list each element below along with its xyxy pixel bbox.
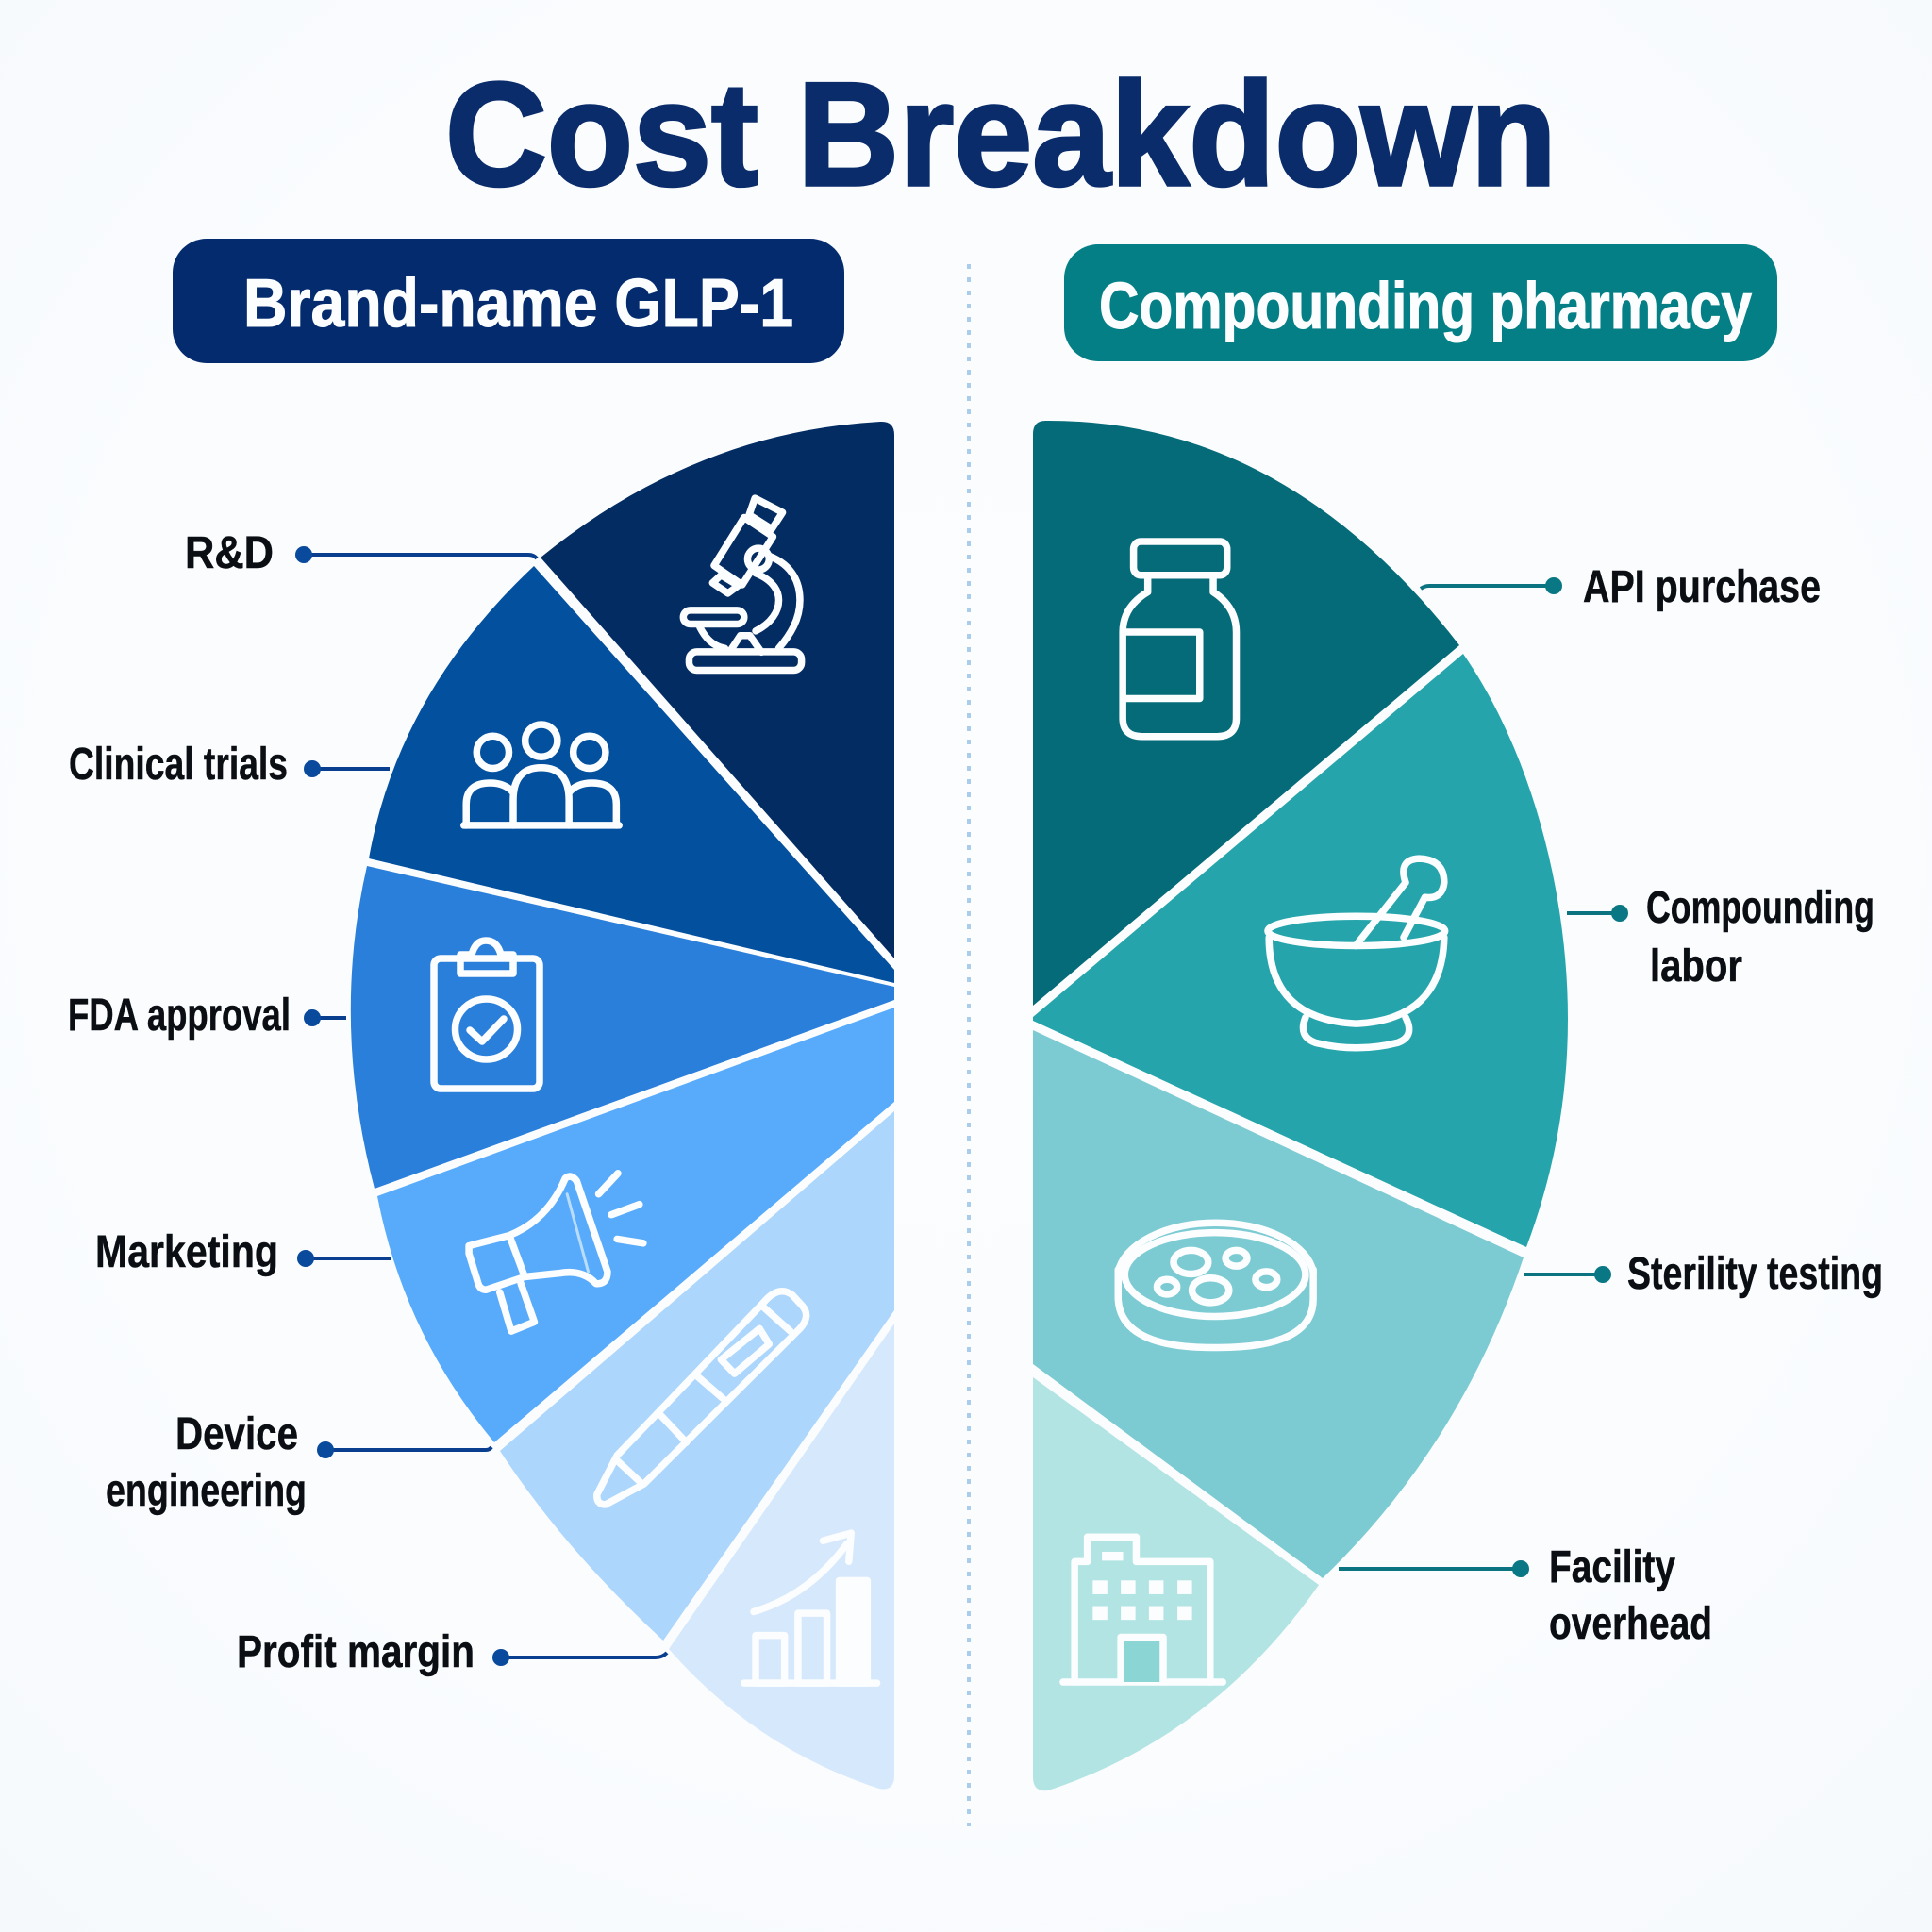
label: API purchase	[1421, 562, 1821, 612]
label: Profit margin: Profit margin	[237, 1627, 475, 1677]
segment: Clinical trials	[369, 566, 894, 983]
label: Sterility testing	[1524, 1249, 1883, 1299]
label: R&D	[185, 528, 537, 578]
header: Compounding pharmacy	[1064, 244, 1777, 361]
icon: petri dish	[1118, 1223, 1313, 1347]
label: Device engineering: engineering	[106, 1466, 307, 1516]
header: Brand-name GLP-1: Brand-name GLP-1	[243, 266, 793, 341]
icon: clipboard with check	[434, 941, 540, 1089]
label: Clinical trials: Clinical trials	[69, 740, 288, 790]
segment: Profit margin	[669, 1324, 894, 1789]
segment: Sterility testing	[1033, 1030, 1524, 1578]
label: FDA approval: FDA approval	[68, 991, 291, 1041]
icon: injector pen	[597, 1291, 807, 1505]
segment: Device engineering	[500, 1111, 894, 1641]
label: Facility overhead: overhead	[1549, 1599, 1712, 1649]
header: Brand-name GLP-1	[173, 239, 844, 363]
panel: brand-name GLP-1 half pie	[351, 422, 894, 1789]
title: Cost Breakdown	[445, 53, 1557, 217]
label: Facility overhead	[1339, 1542, 1712, 1649]
header: Compounding pharmacy: Compounding pharmacy	[1099, 269, 1752, 342]
label: R&D: R&D	[185, 528, 274, 578]
icon: megaphone	[469, 1174, 643, 1331]
label: Facility overhead: Facility	[1549, 1542, 1675, 1592]
icon: microscope	[683, 498, 802, 670]
segment: R&D	[541, 422, 894, 958]
segment: Facility overhead	[1033, 1377, 1319, 1790]
segment: Marketing	[377, 1008, 894, 1442]
label: Device engineering	[106, 1409, 491, 1516]
segment: API purchase	[1033, 421, 1459, 1006]
segment: FDA approval	[351, 866, 894, 1189]
icon: profit bar chart	[744, 1533, 877, 1683]
label: Compounding labor: labor	[1650, 941, 1742, 991]
segment: Compounding labor	[1033, 654, 1568, 1247]
label: Marketing: Marketing	[95, 1227, 278, 1277]
label: Compounding labor	[1567, 883, 1874, 991]
icon: building	[1063, 1537, 1223, 1682]
icon: vial	[1123, 541, 1237, 737]
label: Profit margin	[237, 1627, 667, 1677]
label: Device engineering: Device	[175, 1409, 298, 1459]
panel: compounding pharmacy half pie	[1033, 421, 1568, 1790]
label: API purchase: API purchase	[1583, 562, 1821, 612]
icon: people	[464, 724, 619, 825]
icon: mortar and pestle	[1268, 858, 1445, 1048]
